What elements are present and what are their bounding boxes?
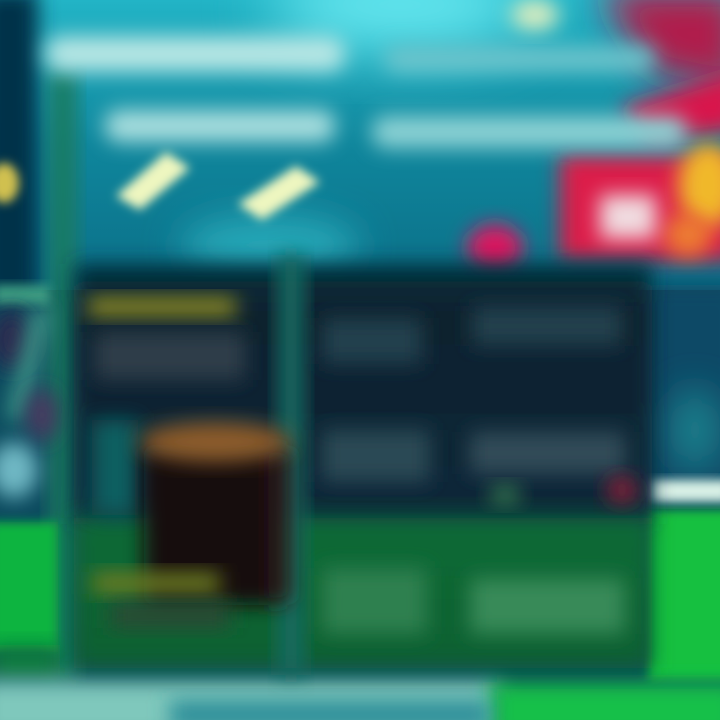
- title: [45, 36, 687, 148]
- card heading: lower left: [92, 572, 220, 594]
- lower-left teal block: [92, 420, 138, 515]
- main panel: [74, 255, 652, 675]
- top-right graphic: [467, 0, 720, 272]
- cup graphic: [139, 422, 291, 605]
- title line 2: [105, 110, 335, 142]
- title line 1 right: [385, 46, 655, 72]
- left side decorations: [0, 163, 58, 498]
- card text: top right: [472, 306, 622, 346]
- card text: top middle: [322, 318, 422, 364]
- card text: mid middle: [322, 430, 430, 482]
- card text: lower right: [470, 578, 625, 634]
- title line 1: [45, 36, 345, 72]
- red dot: [606, 476, 638, 504]
- panel green lower section: [74, 518, 652, 668]
- cup rim: [139, 422, 291, 462]
- card text: left: [95, 332, 245, 380]
- column divider: [278, 255, 304, 675]
- card text: lower middle: [322, 568, 427, 634]
- title accent strokes: [116, 152, 320, 220]
- card heading: yellow: [88, 297, 236, 317]
- card text: lower left: [110, 602, 230, 628]
- title line 2 right: [372, 116, 687, 148]
- green dot: [489, 485, 521, 505]
- cup body: [144, 445, 290, 605]
- card text: mid right: [470, 432, 625, 474]
